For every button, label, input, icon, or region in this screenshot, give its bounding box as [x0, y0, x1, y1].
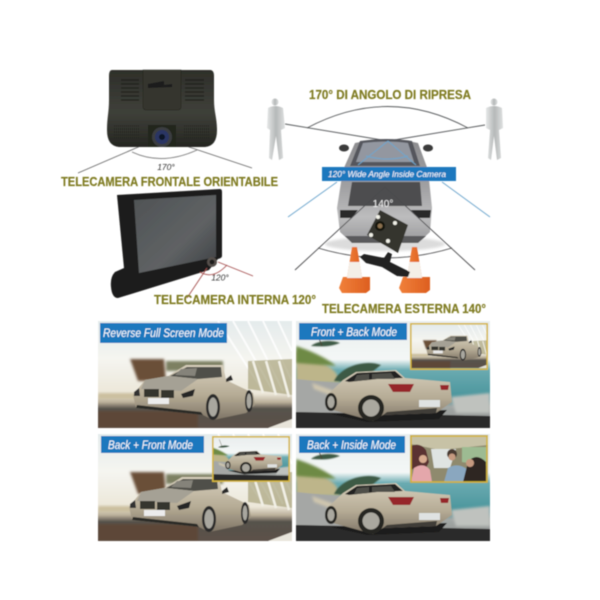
panel: front + back mode: [296, 321, 490, 428]
panel: reverse full screen mode: [98, 321, 292, 428]
panel: front + back mode: Front + Back Mode: [311, 327, 397, 339]
icon: left person: [267, 98, 285, 160]
label: 170 degrees front camera: 170°: [157, 162, 175, 172]
blue inside camera angle lines: [288, 141, 490, 217]
inset: car interior view: [410, 435, 488, 483]
dashcam rear view with 170 degree angle: [78, 70, 252, 173]
heading: external camera: TELECAMERA ESTERNA 140°: [322, 301, 486, 316]
icon: right person: [486, 98, 503, 160]
viewing angle arc and lines: [285, 106, 485, 141]
icon: left traffic cone: [339, 247, 370, 293]
panel: back + front mode: [98, 434, 292, 541]
label: wide angle inside camera: 120° Wide Angle Inside Camera: [328, 170, 447, 179]
heading: inside camera: TELECAMERA INTERNA 120°: [154, 292, 316, 307]
heading: front camera: TELECAMERA FRONTALE ORIENTABILE: [61, 174, 278, 189]
label: 120 degrees inside camera: 120°: [211, 272, 229, 282]
inset: front car view: [409, 322, 489, 371]
silver car rear view: [325, 139, 445, 251]
panel: reverse full screen mode: Reverse Full Screen Mode: [103, 328, 224, 340]
label: wide angle inside camera: [322, 167, 456, 181]
heading: viewing angle: 170° DI ANGOLO DI RIPRESA: [309, 87, 472, 102]
panel: back + front mode: Back + Front Mode: [108, 440, 193, 452]
icon: rear camera with bracket: [360, 210, 410, 277]
panel: back + inside mode: [296, 434, 490, 541]
label: 140 degrees: 140°: [373, 199, 393, 210]
panel: back + inside mode: Back + Inside Mode: [307, 440, 396, 452]
rear camera angle lines: [295, 187, 475, 270]
inset: rear car view: [211, 435, 291, 483]
icon: right traffic cone: [399, 247, 430, 293]
dashcam monitor front view: [111, 189, 253, 298]
